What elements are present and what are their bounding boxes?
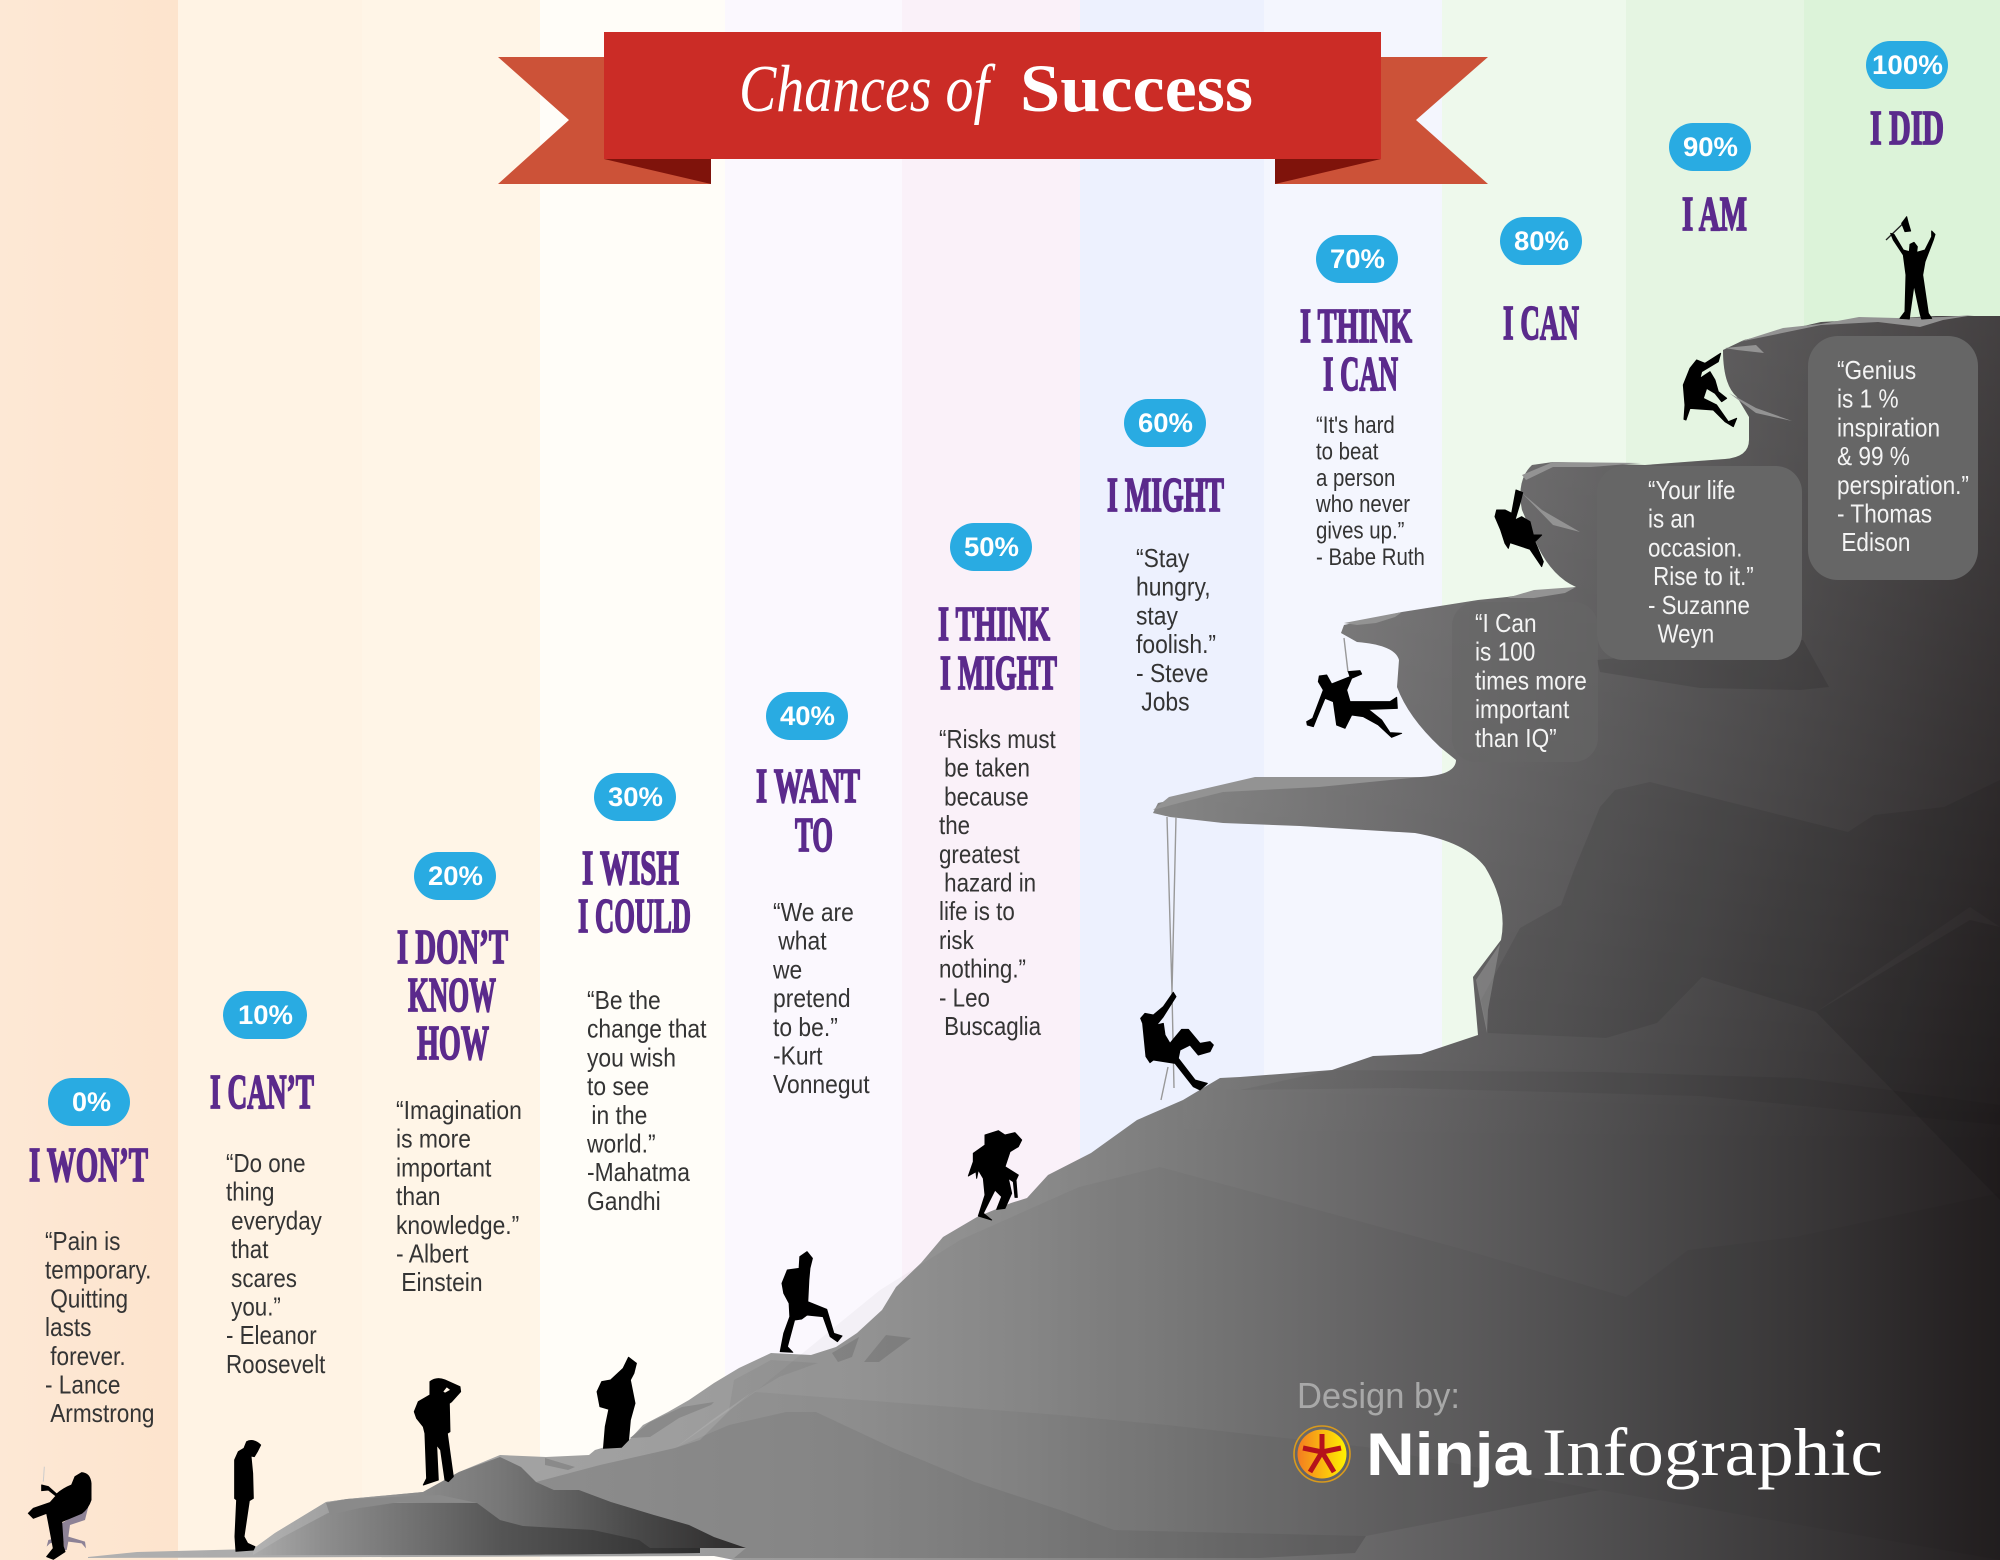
heading I WANT TO: TO [795,807,833,862]
step 40% [756,692,870,1352]
quote Gandhi: change that [587,1015,707,1044]
heading I DON'T KNOW HOW: KNOW [408,967,496,1022]
quote Weyn: occasion. [1648,534,1742,563]
quote Babe Ruth: “It's hard [1316,411,1395,438]
hill inner layer [253,1503,700,1555]
step 70% [1300,235,1425,737]
quote Jobs: “Stay [1136,545,1190,573]
heading I THINK I MIGHT: I MIGHT [940,645,1057,700]
quote IQ: important [1475,696,1569,725]
quote IQ: than IQ” [1475,724,1557,753]
quote Gandhi: Gandhi [587,1188,661,1216]
quote Roosevelt: that [231,1236,269,1265]
quote Roosevelt: thing [226,1178,274,1207]
quote Edison: inspiration [1837,414,1940,443]
heading I WANT TO: I WANT [756,758,860,813]
step 100% [1837,41,1969,558]
quote Roosevelt: you.” [231,1293,281,1322]
quote Einstein: “Imagination [396,1097,522,1125]
quote IQ: times more [1475,667,1587,696]
quote Weyn: - Suzanne [1648,591,1750,620]
quote Roosevelt: everyday [231,1207,323,1236]
quote Edison: & 99 % [1837,443,1910,472]
badge 10%: 10% [238,1000,293,1030]
quote Armstrong: temporary. [45,1256,151,1285]
heading I WISH I COULD: I WISH [582,840,679,895]
figure hanging [1307,671,1402,737]
quote Gandhi: “Be the [587,987,661,1015]
quote Einstein: knowledge.” [396,1212,519,1240]
quote Jobs: stay [1136,602,1179,631]
heading I DON'T KNOW HOW: HOW [417,1015,489,1070]
figure head down [235,1441,261,1551]
rock facets [536,640,2000,1560]
logo wordmark: Ninja [1366,1421,1532,1488]
quote Buscaglia: greatest [939,840,1020,869]
badge 30%: 30% [608,782,663,812]
badge 100% [1866,41,1948,89]
quote Buscaglia: hazard in [944,869,1036,898]
quote Vonnegut: what [777,927,827,956]
credit: Design by Ninja Infographic [1294,1375,1883,1490]
mountain [88,315,2000,1560]
heading I WISH I COULD: I COULD [578,888,691,943]
panel: quote box 100% [1808,336,1978,580]
quote Buscaglia: be taken [944,754,1030,783]
quote Weyn: is an [1648,505,1695,534]
badge 50% [950,523,1032,571]
quote Weyn: “Your life [1648,476,1735,505]
quote Jobs: Jobs [1141,688,1190,717]
quote Buscaglia: the [939,812,970,841]
quote Armstrong: lasts [45,1314,91,1343]
panel: quote box 80% [1452,602,1598,762]
figure hiking [780,1252,842,1352]
heading I THINK I CAN [1300,298,1412,401]
badge 80% [1500,217,1582,265]
quote Buscaglia: nothing.” [939,955,1026,984]
step 20% [396,852,522,1485]
figure climbing [1683,353,1737,427]
quote Armstrong: Armstrong [50,1400,155,1429]
heading I DON'T KNOW HOW [397,919,508,1070]
design by: Design by: [1297,1375,1460,1416]
quote Gandhi: to see [587,1073,649,1101]
quote Vonnegut: Vonnegut [773,1071,870,1100]
quote Vonnegut: -Kurt [773,1042,823,1071]
title text: Success [1020,50,1253,126]
quote Gandhi: you wish [587,1044,676,1073]
quote Einstein: Einstein [401,1269,483,1298]
quote IQ: is 100 [1475,638,1535,667]
badge 90%: 90% [1683,132,1738,162]
ledge highlights [326,315,1974,1515]
step 30% [578,773,707,1448]
foreground hill [253,1457,746,1555]
quote Weyn: Rise to it.” [1653,563,1754,592]
quote Roosevelt: scares [231,1264,297,1293]
quote Babe Ruth: - Babe Ruth [1316,543,1425,570]
logo wordmark light: Infographic [1542,1414,1883,1490]
heading I THINK I MIGHT [938,596,1057,700]
step 80% [1475,217,1587,753]
panel: quote box 90% [1597,466,1802,660]
title ribbon [498,32,1488,184]
heading I DID: I DID [1870,100,1944,155]
quote Vonnegut: “We are [773,899,854,927]
quote Roosevelt: “Do one [226,1149,306,1178]
heading I WISH I COULD [578,840,691,943]
badge 40% [766,692,848,740]
quote Vonnegut: to be.” [773,1014,838,1042]
quote Gandhi: -Mahatma [587,1159,690,1188]
figure shading eyes [414,1379,461,1485]
quote Weyn: Weyn [1657,620,1714,649]
quote Edison: “Genius [1837,357,1916,385]
quote Edison: perspiration.” [1837,471,1969,500]
badge 90% [1669,123,1751,171]
quote Buscaglia: risk [939,926,975,955]
quote Jobs: - Steve [1136,660,1208,688]
figure sitting in chair [28,1467,91,1559]
title text: Chances of [739,52,996,126]
figure with backpack [597,1357,636,1448]
badge 0%: 0% [72,1087,111,1117]
quote Einstein: - Albert [396,1240,469,1269]
quote Gandhi: world.” [586,1130,656,1159]
quote Buscaglia: “Risks must [939,725,1056,754]
step 90% [1648,123,1754,649]
quote Vonnegut: we [772,956,802,985]
figure climbing [1495,490,1543,567]
heading I THINK I MIGHT: I THINK [938,596,1050,651]
quote Vonnegut: pretend [773,985,851,1013]
quote Babe Ruth: to beat [1316,438,1379,465]
icon: ninja star logo [1294,1426,1350,1482]
quote Roosevelt: Roosevelt [226,1350,326,1379]
quote Edison: Edison [1841,529,1910,558]
figure with pack and pole [968,1131,1022,1220]
badge 20%: 20% [428,861,483,891]
quote Babe Ruth: gives up.” [1316,517,1404,544]
quote Armstrong: “Pain is [45,1228,120,1256]
quote Gandhi: in the [591,1102,647,1130]
badge 0% [48,1078,130,1126]
badge 10% [223,991,307,1039]
rope [1344,638,1348,672]
step 10% [210,991,326,1551]
quote Armstrong: forever. [50,1342,126,1371]
quote Babe Ruth: a person [1316,464,1395,491]
badge 70% [1316,235,1398,283]
heading I AM: I AM [1682,186,1747,241]
heading I THINK I CAN: I CAN [1323,346,1398,401]
badge 70%: 70% [1330,244,1385,274]
quote Edison: - Thomas [1837,500,1932,529]
figure on rope [1141,992,1213,1090]
ropes [1161,817,1176,1100]
quote Einstein: than [396,1183,440,1211]
badge 80%: 80% [1514,226,1569,256]
badge 20% [414,852,496,900]
step 0% [28,1078,155,1559]
badge 50%: 50% [964,532,1019,562]
quote Edison: is 1 % [1837,385,1899,414]
quote Buscaglia: Buscaglia [944,1012,1042,1041]
quote Roosevelt: - Eleanor [226,1322,317,1351]
quote Buscaglia: because [944,783,1029,812]
heading I WANT TO [756,758,860,862]
quote Babe Ruth: who never [1315,491,1411,518]
badge 100%: 100% [1872,50,1943,80]
quote Einstein: important [396,1154,491,1183]
heading I DON'T KNOW HOW: I DON’T [397,919,508,974]
badge 60%: 60% [1138,408,1193,438]
quote Jobs: hungry, [1136,573,1211,602]
heading I CAN: I CAN [1503,295,1579,350]
quote Jobs: foolish.” [1136,631,1216,659]
badge 40%: 40% [780,701,835,731]
step 60% [1107,399,1224,1100]
quote Armstrong: - Lance [45,1371,120,1400]
quote Einstein: is more [396,1125,471,1154]
badge 60% [1124,399,1206,447]
heading I WON'T: I WON’T [29,1137,148,1192]
figure with flag [1886,217,1935,319]
quote Buscaglia: life is to [939,898,1015,927]
heading I CAN'T: I CAN’T [210,1064,314,1119]
badge 30% [594,773,676,821]
quote Armstrong: Quitting [50,1285,128,1314]
heading I THINK I CAN: I THINK [1300,298,1412,353]
step 50% [938,523,1057,1220]
heading I MIGHT: I MIGHT [1107,467,1224,522]
quote Buscaglia: - Leo [939,984,990,1013]
quote IQ: “I Can [1475,610,1537,638]
